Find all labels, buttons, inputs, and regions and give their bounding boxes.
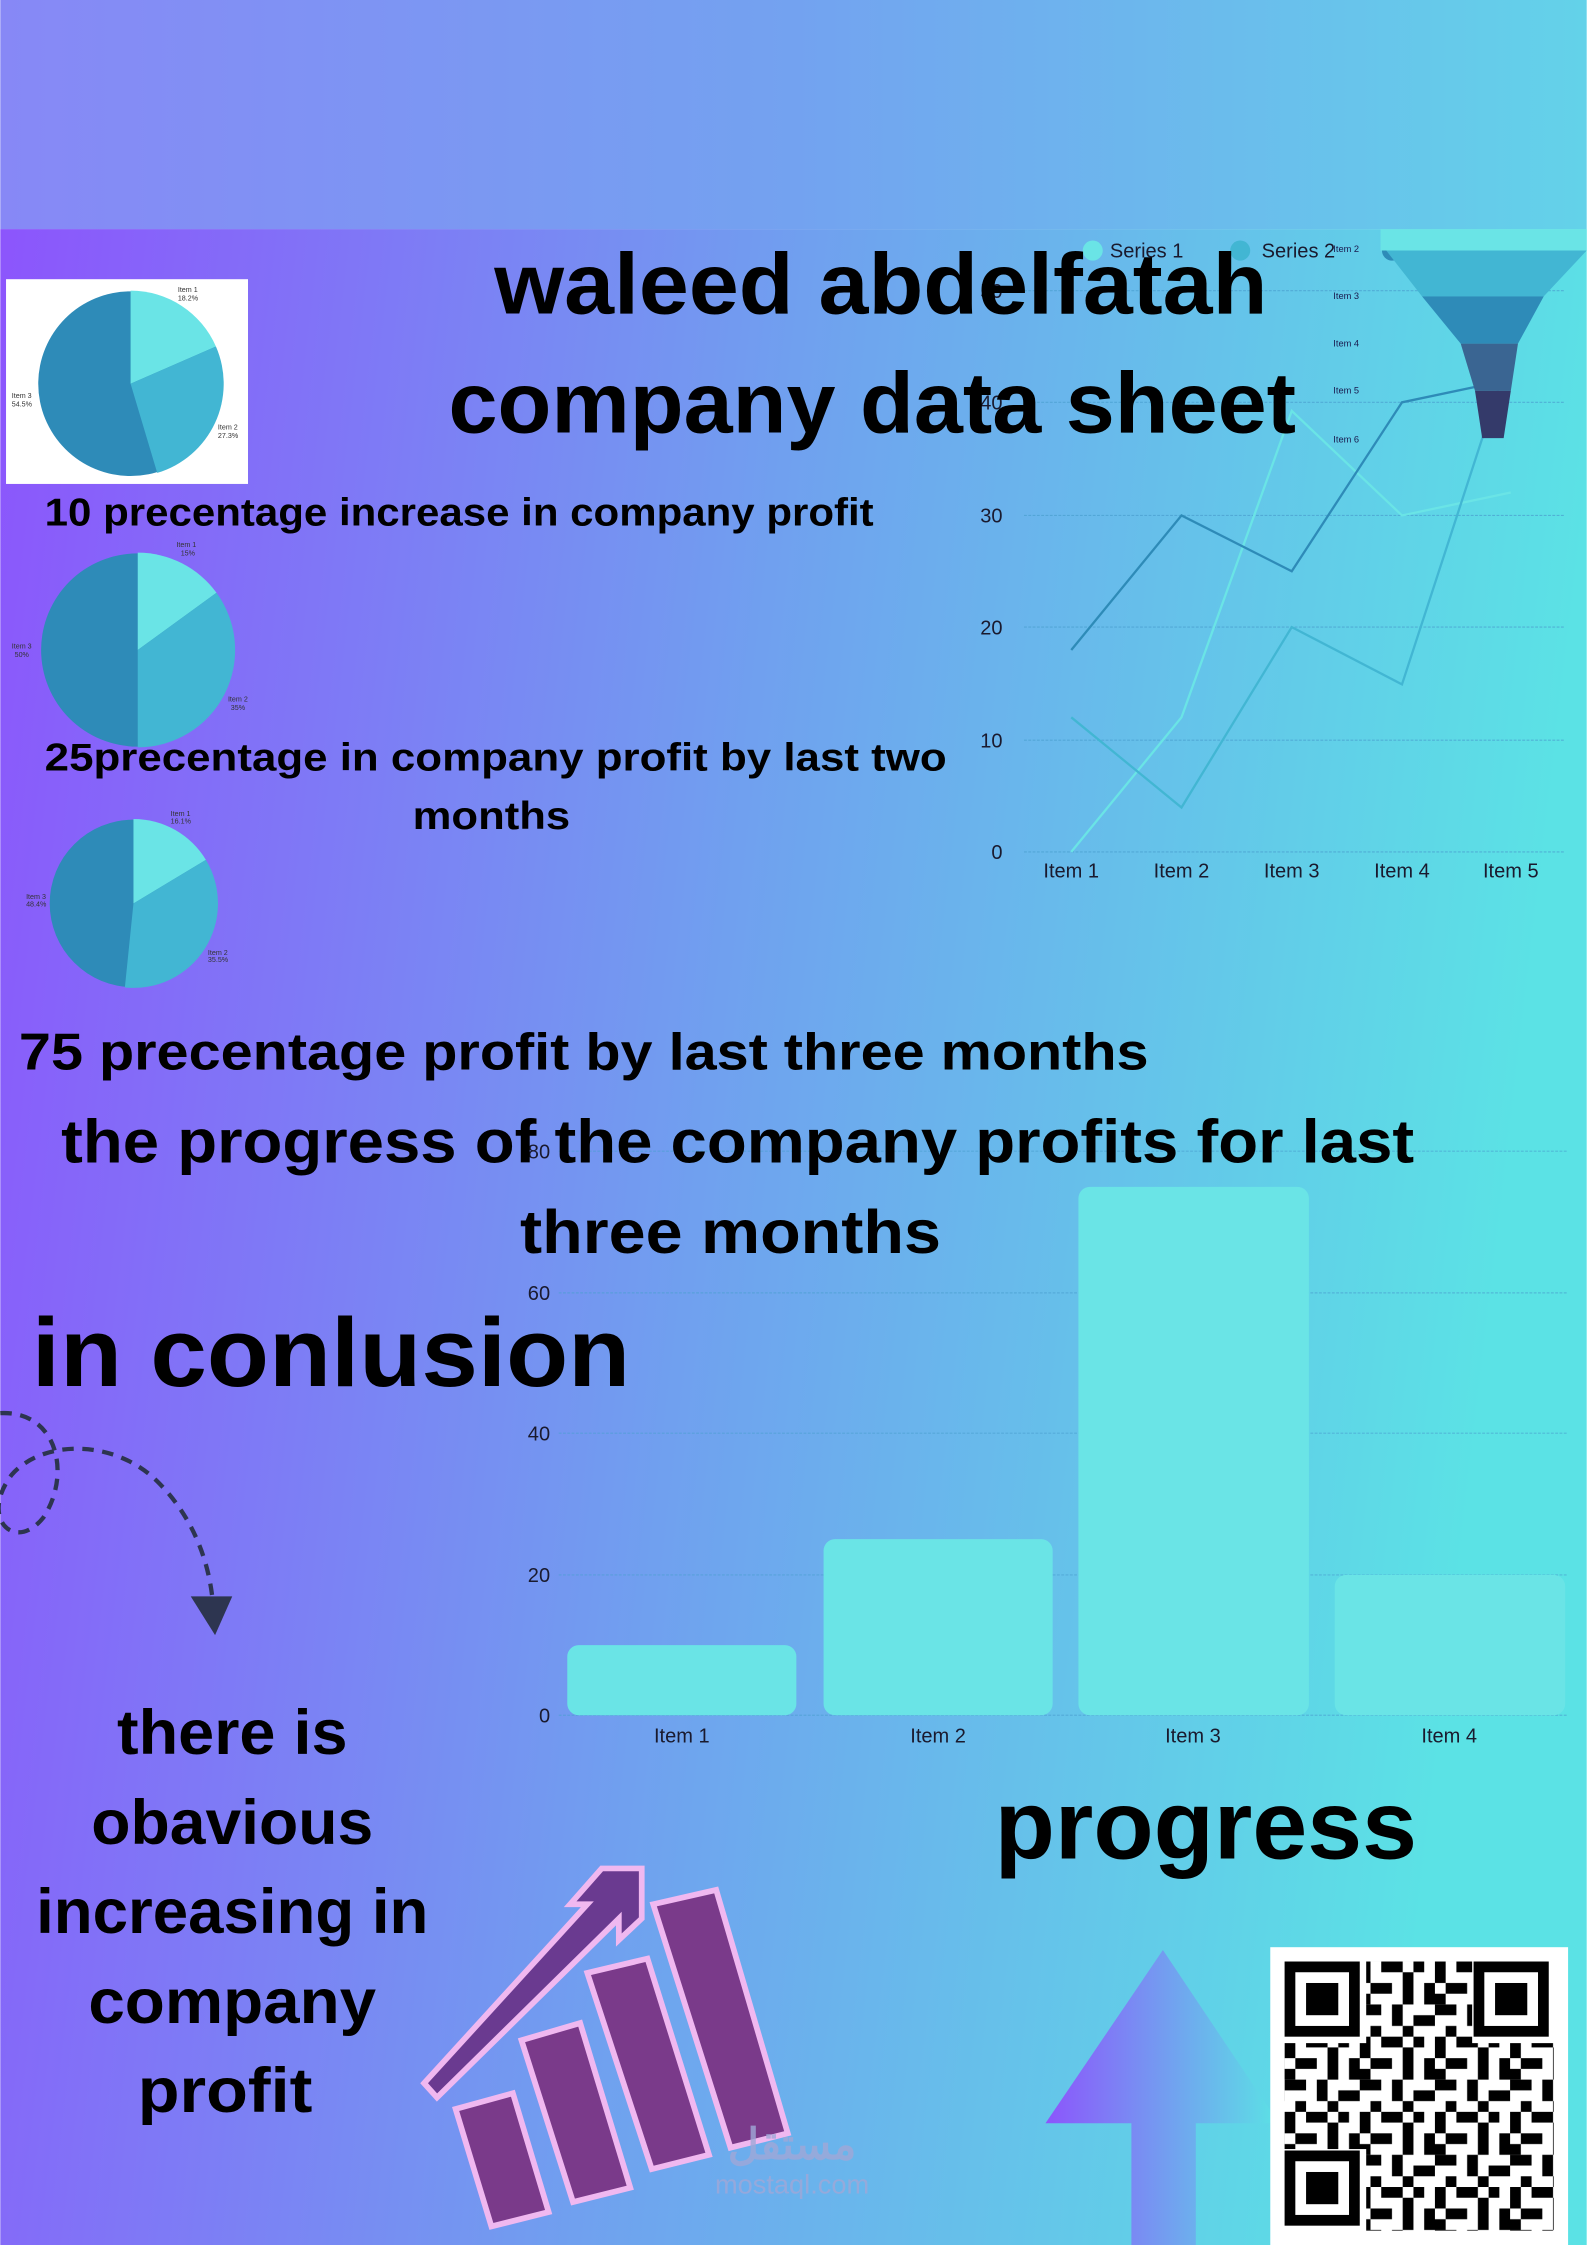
line chart: 20 bbox=[980, 617, 1003, 639]
text: 25 percent: 25precentage in company profit by last two bbox=[45, 736, 947, 779]
QR code bbox=[1270, 1947, 1568, 2245]
watermark bbox=[715, 2121, 869, 2199]
pie chart 2: Item 3 bbox=[12, 643, 32, 651]
line chart: Item 2 bbox=[1154, 861, 1209, 883]
text: 25 percent bbox=[45, 736, 947, 838]
conclusion text: company bbox=[88, 1967, 376, 2037]
line chart: 0 bbox=[991, 842, 1003, 864]
line chart: Item 1 bbox=[1043, 861, 1099, 883]
heading: in conclusion: in conlusion bbox=[32, 1298, 630, 1407]
line chart: 10 bbox=[980, 730, 1003, 752]
title bbox=[448, 237, 1296, 451]
pie chart 3: 35.5% bbox=[208, 956, 229, 964]
pie chart 1: Item 2 bbox=[218, 424, 238, 432]
line chart bbox=[980, 241, 1564, 883]
bar chart: Item 3 bbox=[1165, 1725, 1221, 1747]
pie chart 2: Item 2 bbox=[228, 696, 248, 704]
conclusion text: there is bbox=[117, 1698, 348, 1768]
pie chart 3: Item 1 bbox=[171, 810, 191, 818]
pie chart 2: 35% bbox=[231, 704, 246, 712]
bar chart: 60 bbox=[528, 1283, 550, 1305]
text: 25 percent: months bbox=[413, 795, 570, 838]
line chart: 30 bbox=[980, 506, 1003, 528]
funnel chart: Item 3 bbox=[1333, 291, 1359, 301]
bar chart: 0 bbox=[539, 1705, 550, 1727]
conclusion text: obavious bbox=[91, 1788, 373, 1858]
legend: Series 1 bbox=[1110, 241, 1183, 263]
title: company data sheet bbox=[448, 355, 1296, 451]
funnel chart: Item 6 bbox=[1333, 434, 1359, 444]
pie chart 1 bbox=[6, 279, 248, 484]
pie chart 1: 54.5% bbox=[12, 401, 33, 409]
bar chart bbox=[528, 1141, 1568, 1747]
pie chart 3: Item 3 bbox=[26, 893, 46, 901]
text: 10 percent: 10 precentage increase in company profit bbox=[45, 491, 874, 534]
heading: progress of profits: three months bbox=[520, 1198, 941, 1267]
title: waleed abdelfatah bbox=[493, 237, 1267, 333]
pie chart 3 bbox=[26, 810, 229, 988]
conclusion text: increasing in bbox=[36, 1877, 428, 1947]
line chart: 40 bbox=[980, 392, 1003, 414]
background top band bbox=[0, 0, 1587, 229]
heading: progress of profits: the progress of the company profits for last bbox=[61, 1108, 1414, 1177]
icon: 3D growth bars bbox=[424, 1868, 788, 2226]
line chart: Item 4 bbox=[1374, 861, 1430, 883]
pie chart 1: Item 1 bbox=[178, 286, 198, 294]
legend bbox=[1083, 241, 1402, 263]
conclusion text bbox=[36, 1698, 428, 2126]
pie chart 1: Item 3 bbox=[12, 392, 32, 400]
funnel chart bbox=[1333, 229, 1587, 444]
pie chart 3: Item 2 bbox=[208, 949, 228, 957]
pie chart 1: 27.3% bbox=[218, 432, 239, 440]
bar chart: Item 2 bbox=[910, 1725, 966, 1747]
pie chart 2 bbox=[12, 541, 248, 747]
watermark: مستقل bbox=[728, 2121, 856, 2169]
text: 75 percent: 75 precentage profit by last three months bbox=[19, 1023, 1149, 1081]
pie chart 2: Item 1 bbox=[176, 541, 196, 549]
heading: progress of profits bbox=[61, 1108, 1414, 1267]
watermark: mostaql.com bbox=[715, 2168, 869, 2199]
bar chart: Item 4 bbox=[1421, 1725, 1477, 1747]
bar chart: 40 bbox=[528, 1423, 550, 1445]
pie chart 3: 48.4% bbox=[26, 900, 47, 908]
pie chart 1: 18.2% bbox=[178, 295, 199, 303]
pie chart 2: 50% bbox=[15, 651, 30, 659]
conclusion text: profit bbox=[138, 2056, 312, 2126]
line chart: 50 bbox=[980, 281, 1003, 303]
bar chart: Item 1 bbox=[654, 1725, 710, 1747]
legend: Series 2 bbox=[1262, 241, 1335, 263]
pie chart 3: 16.1% bbox=[171, 817, 192, 825]
heading: progress: progress bbox=[995, 1770, 1417, 1879]
bar chart: 80 bbox=[528, 1141, 550, 1163]
line chart: Item 5 bbox=[1483, 861, 1539, 883]
arrow: dashed curve bbox=[0, 1413, 232, 1635]
funnel chart: Item 5 bbox=[1333, 386, 1359, 396]
funnel chart: Item 4 bbox=[1333, 338, 1359, 348]
line chart: Item 3 bbox=[1264, 861, 1320, 883]
funnel chart: Item 2 bbox=[1333, 244, 1359, 254]
bar chart: 20 bbox=[528, 1565, 550, 1587]
icon: up arrow bbox=[1045, 1950, 1279, 2245]
pie chart 2: 15% bbox=[181, 550, 196, 558]
